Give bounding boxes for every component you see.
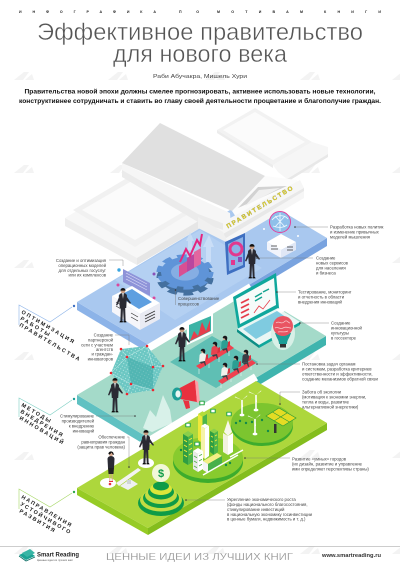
callout: ecology: Забота об экологии [302, 390, 342, 394]
callout: goals [256, 362, 379, 382]
panel: teal platform [74, 287, 326, 449]
panel: green platform [74, 377, 327, 535]
callout: partner network: сети с участием [81, 342, 113, 348]
kicker [19, 10, 381, 14]
callout: goals: Постановка задач органам [302, 362, 356, 366]
callout: partner network [81, 332, 129, 362]
section label: optimization: РАБОТЫ [19, 316, 50, 338]
callout: ecology [279, 390, 366, 410]
callout: process improvement [175, 289, 220, 306]
callout: stimulating producers: производителей [62, 418, 95, 424]
callout: economic growth: в ценные бумаги, недвижимость и т. д.) [227, 516, 306, 522]
website: www.smartreading.ru [321, 553, 381, 559]
panel: government building [65, 108, 328, 265]
icon: balance scale [100, 458, 154, 490]
callout: process improvement: Совершенствование [178, 296, 220, 301]
callout: ecology: тепла и воды, развитие [302, 400, 350, 404]
low block [203, 453, 222, 473]
callout: operating models: или их комплексов [68, 272, 107, 278]
callout: goals: и системам, разработка критериев [302, 366, 372, 372]
callout: innovation culture: Создание [331, 320, 351, 326]
brand name [37, 552, 79, 562]
callout: testing: и отчетность в области [298, 294, 345, 300]
title [37, 19, 363, 68]
kicker: ИНФОГРАФИКА [19, 10, 156, 14]
callout: economic growth: в национальную экономику госинвестиции [227, 512, 313, 517]
callout: new services: для населения [316, 266, 346, 270]
callout: ecology: (мотивация к экономии энергии, [302, 394, 366, 400]
tower C [201, 424, 209, 459]
section label: sustainable development [18, 489, 75, 536]
gable [232, 176, 300, 220]
callout: new policy [294, 224, 383, 240]
callout: partner network: партнерской [88, 338, 114, 342]
icon: smart city [173, 401, 243, 483]
person: network citizen [108, 378, 123, 412]
kicker: КНИГИ [324, 10, 381, 14]
callout: new policy: Разработка новых политик [330, 224, 383, 230]
kicker: МОТИВАМ [217, 10, 303, 14]
tower F [193, 448, 203, 472]
building sign: ПРАВИТЕЛЬСТВО [225, 185, 294, 230]
callout: partner network: агентств [96, 347, 114, 352]
icon: kiosk table [112, 286, 160, 330]
right wing [217, 108, 328, 182]
panel: blue platform [77, 195, 327, 353]
section label: optimization: ОПТИМИЗАЦИЯ [20, 310, 75, 345]
left wing [65, 172, 200, 265]
icon: partner network polyhedron [110, 345, 164, 395]
callout: stimulating producers: Стимулирование [60, 414, 95, 418]
icon: money pyramid [138, 464, 184, 516]
title: Эффективное правительство [37, 19, 363, 46]
callout: smart cities [244, 456, 369, 472]
callout: partner network: Создание [94, 332, 114, 338]
section label: methods [18, 398, 75, 446]
brand name: Ценные идеи из лучших книг [37, 558, 73, 562]
callout: smart cities: Развитие «умных» городов [292, 456, 347, 462]
callout: economic growth: Укрепление экономического роста [227, 497, 296, 502]
section label: methods: МЕТОДЫ [20, 403, 51, 424]
section label: methods: ИННОВАЦИЙ [18, 414, 65, 446]
callout: testing [276, 290, 352, 304]
floating dots [116, 268, 156, 300]
tower A [198, 411, 207, 443]
roof and body [122, 163, 232, 240]
person: woman on scale [108, 451, 114, 482]
callout: partner network: и граждан- [91, 352, 114, 356]
icon: white mountain graph [143, 395, 172, 432]
callout: new services: новых сервисов [316, 260, 349, 266]
panel: purple info screen [123, 269, 150, 296]
icon: globe on server [263, 212, 299, 258]
icon: laptop with checklists [233, 273, 300, 348]
icon: light bulb with brain [271, 316, 295, 350]
icon: gear with growth chart [161, 232, 214, 293]
portico [223, 180, 304, 243]
section label: sustainable development: НАПРАВЛЕНИЯ [20, 495, 72, 529]
slogan: ЦЕННЫЕ ИДЕИ ИЗ ЛУЧШИХ КНИГ [106, 551, 293, 563]
callout: operating models: для отдельных госуслуг [59, 268, 106, 273]
tower D [183, 431, 193, 465]
callout: new services: Создание [316, 256, 336, 260]
icon: eco park with wind turbines and solar panel [231, 390, 296, 446]
audience rows [196, 336, 256, 388]
callout: testing: внедрения инноваций [298, 300, 343, 304]
callout: economic growth: стимулирование инвестиций [227, 507, 285, 512]
callout: new policy: моделей мышления [330, 234, 371, 240]
callout: stimulating producers: инноваций [73, 428, 95, 434]
callout: testing: Тестирование, мониторинг [298, 290, 352, 294]
person: man on scale [139, 430, 154, 464]
callout: innovation culture: культуры [331, 330, 349, 336]
callout: economic growth [185, 497, 313, 522]
callout: equal rights [77, 434, 130, 468]
person: kiosk operator [116, 288, 131, 322]
callout: equal rights: равноправия граждан [81, 440, 126, 444]
section label: sustainable development: РАЗВИТИЯ [18, 509, 56, 534]
icon: presentation board [187, 313, 213, 345]
section label: optimization [18, 305, 81, 363]
callout: new policy: и изменение привычных [330, 230, 380, 234]
callout: goals: создание механизмов обратной связи [302, 376, 379, 382]
brand name: Smart Reading [37, 552, 79, 558]
callout: new services: и бизнеса [316, 270, 336, 276]
section label: sustainable development: УСТОЙЧИВОГО [19, 500, 72, 536]
callout: equal rights: (защита прав человека) [77, 444, 126, 450]
callout: innovation culture: инновационной [331, 326, 363, 330]
icon: megaphone [172, 380, 200, 409]
section label: methods: ВНЕДРЕНИЯ [19, 409, 63, 439]
person: presenter [175, 327, 190, 361]
authors: Раби Абучакра, Мишель Хури [153, 74, 247, 80]
callout: process improvement: процессов [178, 302, 200, 306]
callout: goals: ответственности и эффективности, [302, 372, 373, 376]
callout: smart cities: (их дизайн, развитие и управление [292, 462, 363, 466]
callout: new services [256, 256, 349, 276]
person: service presenter [245, 244, 260, 278]
footer [0, 546, 400, 563]
callout: operating models: операционных моделей [58, 263, 107, 268]
callout: stimulating producers [60, 414, 136, 434]
callout: economic growth: (фонды национального благосостояния, [227, 502, 308, 507]
callout: innovation culture [299, 320, 363, 340]
lead paragraph: Правительства новой эпохи должны смелее прогнозировать, активнее использовать новые технологии, [24, 88, 376, 96]
callout: equal rights: Обеспечение [98, 434, 126, 440]
icon: money pyramid: $ [158, 468, 164, 480]
section label: optimization: ПРАВИТЕЛЬСТВА [18, 323, 81, 363]
title: для нового века [113, 41, 287, 68]
lead paragraph [19, 88, 381, 105]
tower B [210, 429, 218, 455]
kicker: ПО [179, 10, 199, 14]
callout: operating models [56, 258, 123, 278]
callout: ecology: альтернативной энергетики) [302, 404, 359, 410]
callout: innovation culture: в госсекторе [331, 336, 357, 340]
callout: operating models: Создание и оптимизация [56, 258, 107, 263]
callout: stimulating producers: к внедрению [69, 424, 95, 428]
tower E with spire [223, 420, 233, 455]
lead paragraph: конструктивнее сотрудничать и ставить во главу своей деятельности процветание и благополучие граждан. [19, 98, 381, 105]
icon: Smart Reading logo [19, 549, 35, 561]
callout: smart cities: ими определяют перспективы страны) [292, 466, 369, 472]
icon: tablet with chart [225, 233, 245, 275]
callout: partner network: инноваторов [88, 356, 114, 362]
